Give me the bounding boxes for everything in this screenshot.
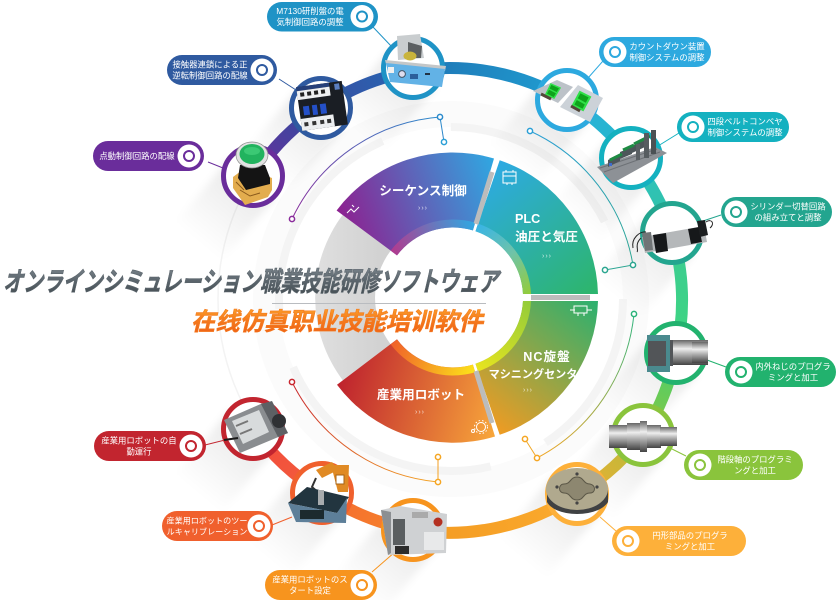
label: contactor interlock — [167, 55, 277, 85]
label: jog control — [93, 141, 204, 171]
label: M7130 — [267, 2, 378, 32]
label: robot auto run: 動運行 — [126, 446, 152, 456]
sector: PLC: PLC — [515, 212, 540, 226]
label: thread machining — [725, 357, 836, 387]
label: thread machining: ミングと加工 — [768, 372, 818, 382]
label: tool calibration: ルキャリブレーション — [167, 526, 247, 536]
long drop shadows of product circles — [175, 49, 699, 600]
label: cylinder switching: の組み立てと調整 — [754, 212, 822, 222]
thin connector arcs — [289, 114, 637, 485]
circle: countdown device — [533, 70, 603, 130]
sector: industrial robot — [337, 339, 495, 443]
sector: NC lathe: マシニングセンタ — [489, 367, 577, 381]
background decorative rings — [218, 66, 684, 532]
title: オンラインシミュレーション職業技能研修ソフトウェア — [1, 259, 505, 299]
label: robot auto run: 産業用ロボットの自 — [101, 436, 177, 446]
circle: disc part — [546, 464, 608, 524]
circle: robot tool — [288, 462, 352, 523]
sector: PLC: ››› — [542, 253, 552, 260]
sector: PLC — [476, 160, 598, 294]
label: tool calibration — [162, 511, 273, 541]
circle: stepped shaft — [609, 406, 677, 464]
label: conveyor: 制御システムの調整 — [707, 128, 783, 138]
separators — [476, 172, 590, 423]
circle: teach pendant — [224, 400, 288, 458]
outer gradient ring — [253, 68, 682, 533]
label: circular part: ミングと加工 — [665, 542, 715, 552]
label: stepped shaft: 階段軸のプログラミ — [717, 454, 793, 464]
circle: pushbutton — [224, 142, 282, 206]
label: robot auto run — [94, 431, 206, 461]
label: contactor interlock: 逆転制御回路の配線 — [172, 70, 248, 80]
sector: industrial robot: 産業用ロボット — [377, 387, 465, 402]
label: circular part: 円形部品のプログラ — [652, 530, 728, 540]
label: countdown — [599, 37, 711, 67]
sector: sequence control: ››› — [418, 205, 428, 212]
label: cylinder switching: シリンダー切替回路 — [750, 202, 826, 212]
central donut chart — [315, 152, 598, 443]
sector: PLC: 油圧と気圧 — [515, 229, 578, 244]
label: stepped shaft: ングと加工 — [734, 466, 776, 476]
sector: NC lathe: ››› — [523, 387, 533, 394]
title — [1, 259, 505, 338]
label: countdown: カウントダウン装置 — [629, 42, 705, 52]
sector: NC lathe: NC旋盤 — [523, 349, 571, 364]
label: countdown: 制御システムの調整 — [629, 52, 705, 62]
circle: M7130 grinder — [384, 34, 446, 98]
label: stepped shaft — [684, 450, 803, 480]
leader lines — [205, 27, 726, 572]
label: circular part — [612, 526, 746, 556]
label: contactor interlock: 接触器連鎖による正 — [172, 60, 248, 70]
sector: NC lathe — [476, 301, 598, 435]
circle: contactor — [292, 78, 350, 138]
label: cylinder switching — [721, 197, 832, 227]
label: tool calibration: 産業用ロボットのツー — [167, 516, 247, 526]
circle: conveyor — [597, 128, 667, 188]
sector: sequence control: シーケンス制御 — [379, 184, 467, 198]
label: robot start: 産業用ロボットのス — [272, 574, 348, 584]
subtitle: 在线仿真职业技能培训软件 — [189, 302, 489, 338]
label: jog control: 点動制御回路の配線 — [99, 151, 175, 161]
gray left wedge — [315, 214, 391, 381]
label: conveyor — [677, 112, 789, 142]
sector: industrial robot: ››› — [415, 409, 425, 416]
label: robot start — [265, 570, 377, 600]
label: conveyor: 四段ベルトコンベヤ — [707, 116, 783, 126]
circle: robot controller — [381, 500, 447, 560]
sector: sequence control — [337, 152, 494, 255]
label: robot start: タート設定 — [289, 586, 332, 596]
circle: threaded part — [646, 324, 708, 382]
label: M7130: M7130研削盤の電 — [276, 6, 344, 16]
label: M7130: 気制御回路の調整 — [276, 17, 344, 27]
label: thread machining: 内外ねじのプログラ — [755, 362, 831, 372]
circle: cylinder valve — [633, 204, 713, 262]
